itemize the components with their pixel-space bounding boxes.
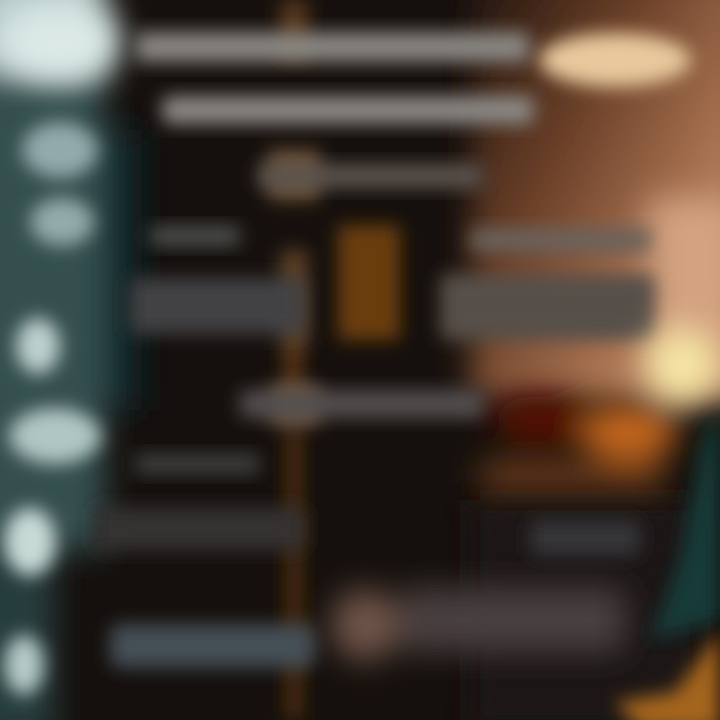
text block: bottom left — [110, 624, 315, 668]
panel: right warm wall — [470, 0, 720, 720]
text block: lower left label — [135, 454, 260, 474]
text block: right label — [470, 228, 650, 252]
text block: right paragraph — [440, 274, 655, 340]
heading: title line 1 — [135, 32, 530, 62]
text block: lower right paragraph — [530, 520, 640, 556]
icon: pale blob 3 — [16, 318, 60, 374]
icon: top left bright highlight — [0, 2, 120, 82]
central brown panel — [338, 225, 400, 340]
text block: left label — [150, 226, 240, 246]
icon: pale blob 6 — [4, 635, 44, 695]
text block: bottom right — [331, 588, 625, 661]
heading: title line 2 — [162, 96, 534, 124]
icon: pale blob 4 — [9, 408, 101, 464]
icon: orange corner — [615, 630, 720, 720]
text block: lower left paragraph — [95, 507, 305, 551]
icon: ceiling lamp — [539, 33, 691, 87]
icon: pale blob 2 — [30, 198, 94, 246]
text block: subheading one — [258, 164, 483, 188]
icon: pale blob 5 — [4, 508, 56, 576]
text block: left paragraph — [130, 278, 305, 334]
icon: warm glow — [480, 327, 720, 488]
central orange stripe — [268, 0, 320, 720]
text block: subheading two — [240, 390, 485, 418]
panel: left teal strip — [0, 0, 140, 720]
icon: pale blob 1 — [22, 122, 98, 178]
icon: teal chair — [650, 410, 720, 640]
left column icons — [4, 122, 101, 695]
